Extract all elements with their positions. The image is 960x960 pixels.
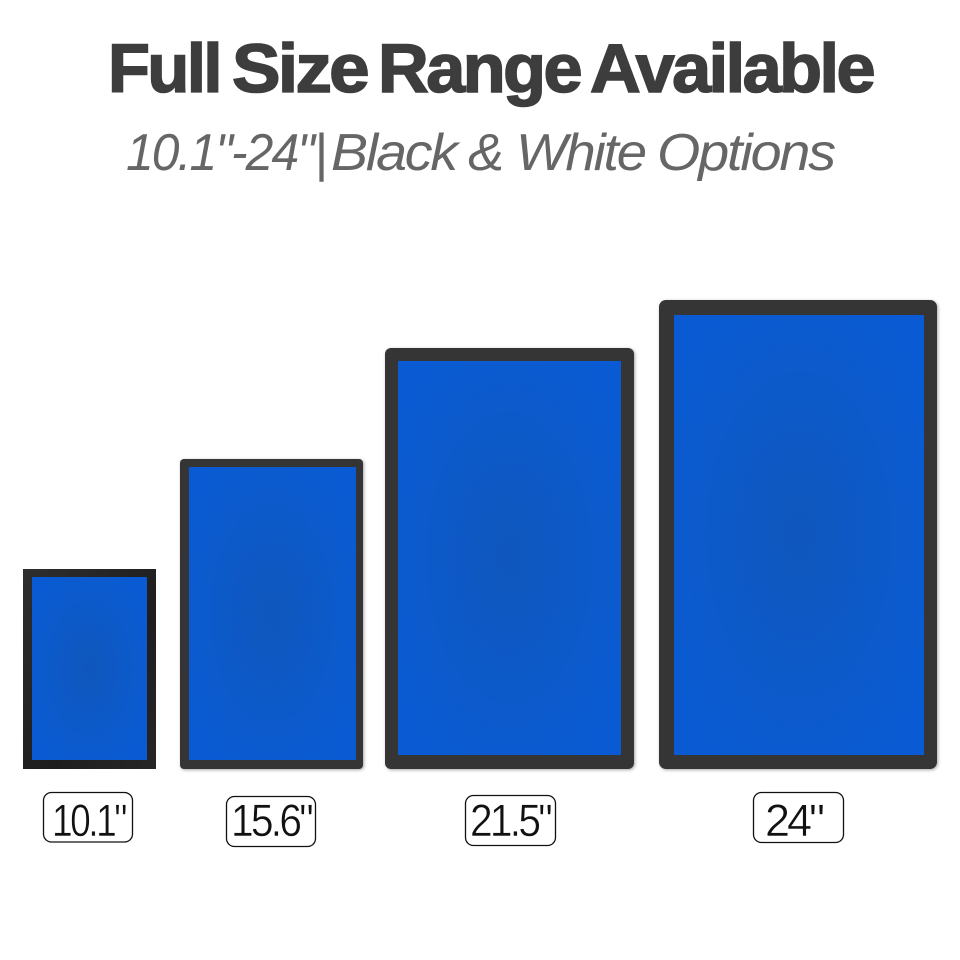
size label: 24 inch <box>754 792 844 846</box>
title: Range <box>378 30 581 107</box>
size label: 21.5 inch: 21.5" <box>470 795 552 846</box>
monitor: 24 inch <box>659 300 937 769</box>
subtitle: & <box>468 124 502 182</box>
title <box>108 30 874 107</box>
subtitle: Black <box>331 124 461 182</box>
subtitle <box>126 124 835 182</box>
subtitle: | <box>314 124 326 182</box>
size label: 24 inch: 24" <box>765 795 824 846</box>
size label: 15.6 inch: 15.6" <box>231 795 313 846</box>
monitor: 10.1 inch <box>23 569 156 769</box>
size label: 10.1 inch: 10.1" <box>52 795 127 846</box>
subtitle: White <box>516 124 645 182</box>
title: Size <box>232 30 368 107</box>
title: Full <box>108 30 220 107</box>
subtitle: 10.1"-24" <box>126 124 317 182</box>
subtitle: Options <box>657 124 835 182</box>
monitor: 21.5 inch <box>385 348 634 769</box>
monitor: 15.6 inch <box>180 459 363 769</box>
title: Available <box>590 30 874 107</box>
